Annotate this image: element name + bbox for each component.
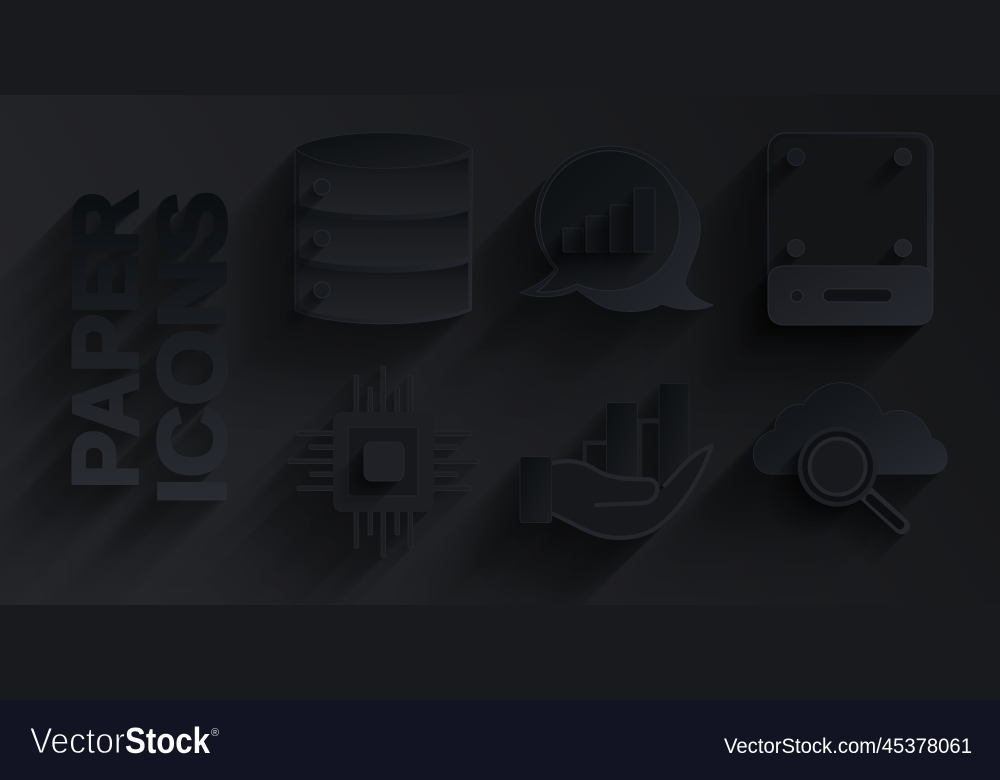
icon: hard drive: [768, 133, 933, 325]
panel: icon sheet: [0, 95, 1000, 605]
logo: VectorStock: Vector: [30, 720, 125, 761]
heading: PAPER: PAPER: [55, 191, 157, 489]
icon: hand holding bar chart: [520, 383, 712, 538]
logo: VectorStock: [30, 720, 219, 761]
panel: icon grid and heading: [55, 133, 947, 557]
heading: ICONS: ICONS: [139, 191, 246, 505]
icon: microchip: [288, 366, 479, 557]
icon: cloud with magnifying glass: [753, 383, 947, 526]
logo: VectorStock: ®: [211, 727, 219, 739]
logo: VectorStock: Stock: [125, 720, 211, 761]
icon: database: [295, 133, 472, 324]
icon: speech bubble with bar chart: [520, 146, 713, 312]
image id text: VectorStock.com/45378061: [724, 735, 972, 758]
footer bar: [0, 700, 1000, 780]
